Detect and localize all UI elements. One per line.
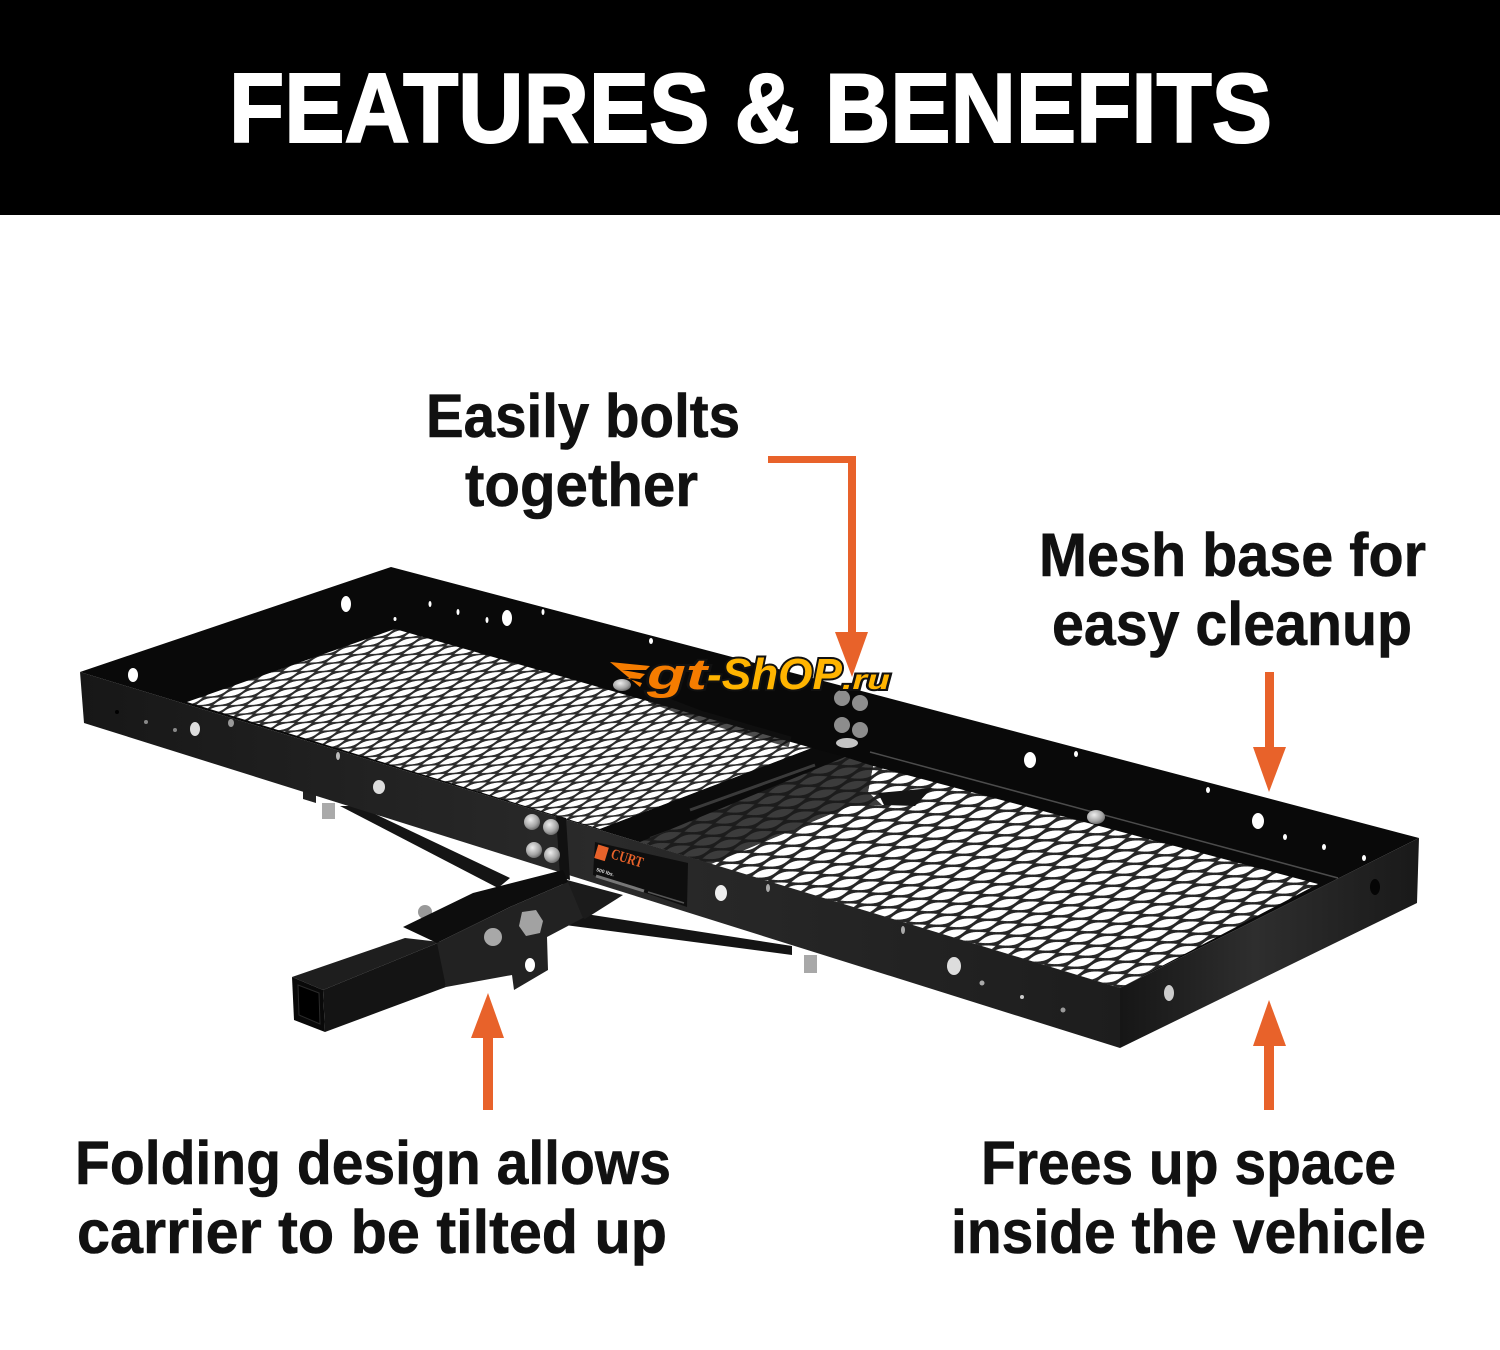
watermark logo: -ShOP — [707, 650, 843, 699]
callout: easily bolts together: Easily bolts — [426, 382, 740, 450]
header band — [0, 0, 1500, 215]
bracket hole — [525, 958, 535, 972]
callout: frees up space: inside the vehicle — [951, 1198, 1426, 1266]
callout: folding design — [75, 1129, 671, 1266]
CURT product label: CURT — [609, 847, 645, 871]
arrow: mesh base — [1253, 672, 1286, 792]
white mounting holes — [128, 596, 1366, 861]
watermark logo — [610, 650, 890, 699]
callout: folding design: Folding design allows — [75, 1129, 671, 1197]
joint bolts — [524, 679, 1105, 863]
support struts — [303, 790, 817, 973]
watermark logo: .ru — [842, 664, 890, 695]
front wall holes — [115, 710, 1380, 1012]
callout: easily bolts together — [426, 382, 740, 519]
arrow: folding design — [471, 993, 504, 1110]
callout: mesh base — [1039, 521, 1426, 658]
callout: mesh base: Mesh base for — [1039, 521, 1426, 589]
back rail highlight line — [870, 752, 1338, 878]
cargo carrier product illustration — [80, 567, 1419, 1048]
divider channel — [600, 748, 845, 842]
carrier interior — [80, 567, 1419, 988]
callout: frees up space: Frees up space — [981, 1129, 1396, 1197]
underside gusset — [548, 880, 623, 919]
arrow: easily bolts together — [768, 456, 868, 677]
hex bolt — [519, 910, 543, 936]
right end wall — [1120, 838, 1419, 1048]
mesh deck: right section — [640, 757, 1318, 988]
mesh deck: left section — [187, 629, 812, 829]
CURT product label — [593, 842, 688, 907]
title: FEATURES & BENEFITS — [229, 53, 1272, 163]
callout: mesh base: easy cleanup — [1052, 590, 1412, 658]
callout: easily bolts together: together — [465, 451, 698, 519]
front wall — [80, 672, 1120, 1048]
arrow: frees up space — [1253, 1000, 1286, 1110]
hitch shank and receiver — [292, 870, 583, 1032]
panel joint — [556, 815, 570, 880]
callout: frees up space — [951, 1129, 1426, 1266]
callout: folding design: carrier to be tilted up — [77, 1198, 667, 1266]
CURT product label: 500 lbs. — [595, 867, 615, 878]
watermark logo: gt — [646, 650, 710, 699]
round bolt — [484, 928, 502, 946]
